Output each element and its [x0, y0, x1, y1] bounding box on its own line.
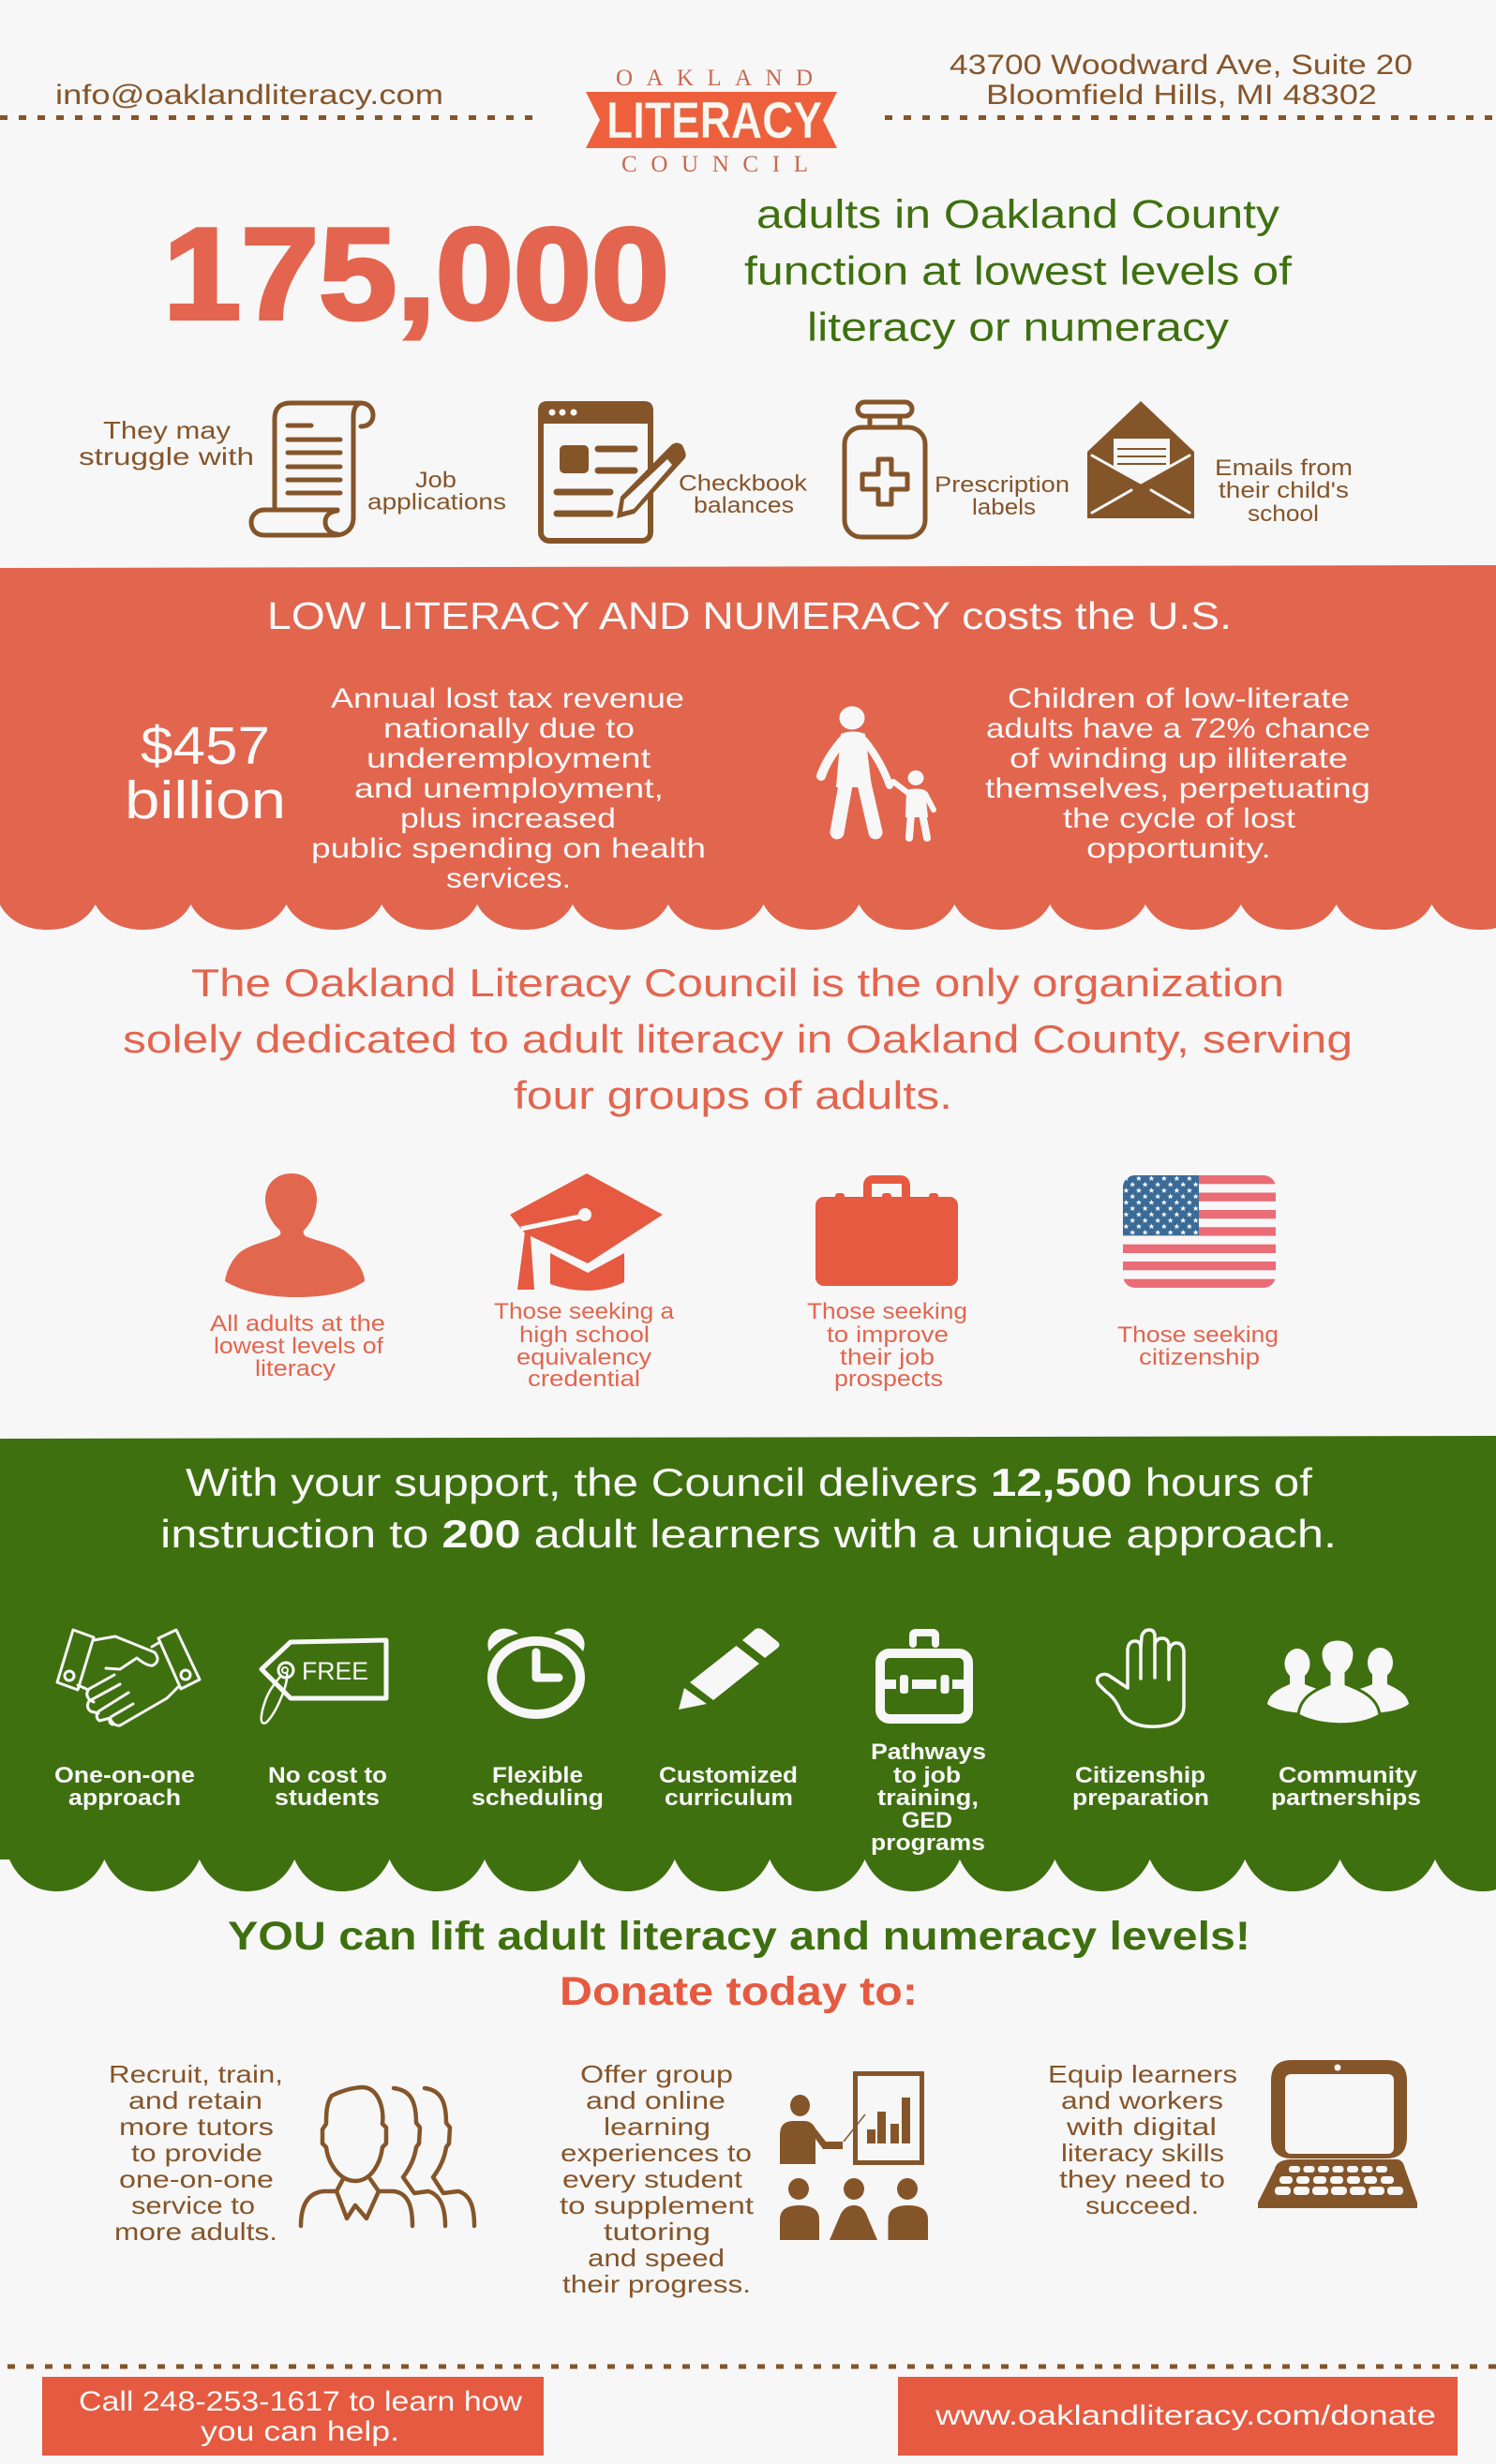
label: high school equivalency: Those seeking a — [494, 1299, 675, 1324]
logo: Oakland Literacy Council: COUNCIL — [621, 152, 808, 177]
header: street address — [950, 50, 1413, 111]
label: citizenship: citizenship — [1139, 1345, 1260, 1370]
label: job prospects: Those seeking — [807, 1299, 967, 1324]
icon: scroll — [251, 403, 373, 535]
icon: free tag: FREE — [302, 1657, 368, 1685]
label: all adults: literacy — [255, 1356, 336, 1381]
label: high school equivalency: credential — [528, 1366, 640, 1392]
text: offer group and online learning: and online — [586, 2086, 726, 2114]
stat: $457 billion — [125, 716, 286, 830]
labels: approach features: training, — [877, 1785, 979, 1811]
label: job prospects: prospects — [834, 1366, 943, 1392]
text: annual lost tax revenue: nationally due to — [383, 713, 635, 744]
label: citizenship — [1117, 1322, 1279, 1370]
labels: approach features: Community — [1279, 1763, 1418, 1788]
text: annual lost tax revenue: services. — [446, 863, 571, 894]
label: job prospects: to improve — [827, 1322, 949, 1348]
text: children of low-literate adults: Children of low-literate — [1008, 683, 1350, 714]
statistic description: function at lowest levels of — [744, 249, 1293, 294]
label: job applications: Job — [415, 468, 456, 493]
text: they may struggle with — [79, 416, 254, 470]
heading: you can lift adult literacy: YOU can lift adult literacy and numeracy levels! — [228, 1914, 1250, 1959]
labels: approach features: programs — [871, 1830, 985, 1856]
label: emails from their child's school — [1215, 455, 1353, 527]
text: offer group and online learning: every student — [562, 2165, 743, 2193]
icon: adult silhouette — [225, 1173, 365, 1297]
text: offer group and online learning: learning — [604, 2113, 711, 2141]
label: job prospects — [807, 1299, 967, 1392]
heading: only organization dedicated to adult literacy: The Oakland Literacy Council is the only organization — [191, 961, 1284, 1005]
text: annual lost tax revenue: Annual lost tax revenue — [331, 683, 684, 714]
statistic description — [744, 192, 1293, 351]
labels: approach features: scheduling — [471, 1785, 604, 1811]
text: recruit tutors: and retain — [128, 2086, 262, 2114]
callout: call to learn how: you can help. — [201, 2416, 399, 2447]
icon: american flag — [1123, 1175, 1276, 1288]
logo: Oakland Literacy Council: LITERACY — [606, 91, 822, 149]
text: recruit tutors: service to — [131, 2191, 255, 2219]
callout: donate url — [898, 2377, 1458, 2456]
labels: approach features: partnerships — [1271, 1785, 1421, 1811]
label: emails from their child's school: Emails from — [1215, 455, 1353, 481]
text: equip learners and workers: succeed. — [1085, 2191, 1199, 2219]
logo: Oakland Literacy Council: OAKLAND — [616, 66, 813, 91]
label: emails from their child's school: school — [1248, 501, 1319, 527]
icon: community group — [1267, 1639, 1409, 1725]
icon: medicine bottle — [845, 402, 925, 537]
header dotted rule left — [0, 115, 534, 120]
header: email contact: info@oaklandliteracy.com — [55, 80, 443, 111]
text: equip learners and workers: and workers — [1061, 2086, 1223, 2114]
panel: unique approach — [0, 1436, 1496, 1891]
logo: Oakland Literacy Council — [586, 66, 837, 177]
heading: only organization dedicated to adult literacy: solely dedicated to adult literacy in Oakland County, serving — [123, 1017, 1353, 1061]
label: citizenship: Those seeking — [1117, 1322, 1279, 1348]
label: job prospects: their job — [840, 1345, 935, 1370]
label: emails from their child's school: their child's — [1219, 478, 1349, 503]
panel: cost of low literacy — [0, 565, 1496, 930]
icon: pencil — [679, 1628, 780, 1710]
heading: with your support: instruction to 200 adult learners with a unique approach. — [160, 1512, 1337, 1556]
label: all adults: All adults at the — [210, 1311, 385, 1337]
text: children of low-literate adults: of winding up illiterate — [1010, 743, 1348, 774]
heading: with your support — [160, 1460, 1337, 1556]
text: recruit tutors: one-on-one — [119, 2165, 274, 2193]
footer dotted rule — [7, 2364, 1496, 2369]
header dotted rule right — [885, 115, 1496, 120]
callout: call to learn how: Call 248-253-1617 to learn how — [79, 2386, 522, 2417]
labels: approach features — [54, 1740, 1421, 1856]
text: annual lost tax revenue: public spending on health — [311, 833, 706, 864]
heading: only organization dedicated to adult literacy — [123, 961, 1353, 1117]
text: children of low-literate adults: opportunity. — [1086, 833, 1271, 864]
text: children of low-literate adults: themselves, perpetuating — [985, 773, 1370, 804]
icon: suitcase — [815, 1179, 958, 1286]
text: offer group and online learning: to supplement — [560, 2191, 755, 2219]
labels: approach features: GED — [902, 1808, 952, 1833]
text: offer group and online learning: their progress. — [562, 2270, 751, 2298]
stat: $457 billion: $457 — [141, 716, 270, 776]
label: checkbook balances — [679, 470, 808, 518]
icon: graduation cap — [510, 1173, 663, 1291]
icon: envelope — [1087, 401, 1194, 518]
label: high school equivalency: high school — [519, 1322, 650, 1348]
labels: approach features: approach — [68, 1785, 181, 1811]
label: prescription labels: labels — [972, 495, 1036, 520]
labels: approach features: No cost to — [268, 1763, 387, 1788]
heading: with your support: With your support, the Council delivers 12,500 hours of — [186, 1460, 1312, 1504]
icon: presenter with chart and audience — [780, 2073, 928, 2240]
text: they may struggle with: They may — [103, 416, 231, 444]
text: children of low-literate adults: the cycle of lost — [1063, 803, 1296, 834]
icon: checklist form with pencil — [538, 401, 686, 541]
labels: approach features: Citizenship — [1075, 1763, 1205, 1788]
label: checkbook balances: Checkbook — [679, 470, 808, 497]
icon: three people outlines — [301, 2087, 474, 2226]
text: annual lost tax revenue — [311, 683, 706, 894]
text: recruit tutors: more tutors — [119, 2113, 274, 2141]
label: prescription labels: Prescription — [935, 472, 1070, 498]
label: job applications — [367, 468, 506, 515]
text: annual lost tax revenue: plus increased — [400, 803, 616, 834]
labels: approach features: Flexible — [492, 1763, 583, 1788]
icon: adult and child — [821, 707, 934, 838]
icon: free tag — [262, 1640, 386, 1724]
text: offer group and online learning — [560, 2060, 755, 2298]
text: equip learners and workers: literacy skills — [1061, 2139, 1224, 2167]
statistic description: literacy or numeracy — [807, 306, 1230, 351]
icon: raised hand — [1098, 1630, 1184, 1726]
header: street address: Bloomfield Hills, MI 48302 — [986, 80, 1377, 111]
callout: call to learn how — [42, 2377, 544, 2456]
text: annual lost tax revenue: underemployment — [367, 743, 651, 774]
text: equip learners and workers: with digital — [1066, 2113, 1217, 2141]
callout: donate url: www.oaklandliteracy.com/donate — [935, 2400, 1436, 2431]
labels: approach features: students — [275, 1785, 380, 1811]
text: recruit tutors: to provide — [131, 2139, 262, 2167]
labels: approach features: curriculum — [665, 1785, 793, 1811]
label: job applications: applications — [367, 489, 506, 515]
label: high school equivalency — [494, 1299, 675, 1392]
label: checkbook balances: balances — [694, 493, 794, 518]
big statistic 175,000: 175,000 — [163, 202, 669, 347]
text: children of low-literate adults — [985, 683, 1370, 864]
icon: handshake — [57, 1630, 200, 1725]
text: equip learners and workers: Equip learners — [1048, 2060, 1237, 2088]
text: offer group and online learning: experiences to — [561, 2139, 752, 2167]
label: prescription labels — [935, 472, 1070, 520]
statistic description: adults in Oakland County — [756, 192, 1280, 237]
heading: costs the U.S.: LOW LITERACY AND NUMERACY costs the U.S. — [267, 594, 1232, 637]
text: equip learners and workers: they need to — [1059, 2165, 1225, 2193]
labels: approach features: One-on-one — [54, 1763, 195, 1788]
labels: approach features: Pathways — [871, 1740, 986, 1765]
text: offer group and online learning: Offer group — [580, 2060, 733, 2088]
icon: laptop — [1258, 2060, 1417, 2208]
label: high school equivalency: equivalency — [516, 1345, 651, 1370]
label: all adults — [210, 1311, 385, 1381]
label: all adults: lowest levels of — [214, 1334, 383, 1359]
text: children of low-literate adults: adults have a 72% chance — [986, 713, 1370, 744]
text: recruit tutors: Recruit, train, — [109, 2060, 283, 2088]
text: equip learners and workers — [1048, 2060, 1237, 2219]
labels: approach features: Customized — [659, 1763, 798, 1788]
icon: briefcase — [875, 1633, 972, 1719]
labels: approach features: preparation — [1072, 1785, 1209, 1811]
labels: approach features: to job — [893, 1763, 961, 1788]
text: recruit tutors — [109, 2060, 283, 2246]
text: they may struggle with: struggle with — [79, 442, 254, 470]
text: recruit tutors: more adults. — [114, 2218, 277, 2246]
heading: only organization dedicated to adult literacy: four groups of adults. — [514, 1073, 952, 1117]
icon: alarm clock — [487, 1629, 585, 1714]
header: street address: 43700 Woodward Ave, Suite 20 — [950, 50, 1413, 81]
stat: $457 billion: billion — [125, 770, 286, 830]
heading: donate today: Donate today to: — [560, 1969, 918, 2014]
text: offer group and online learning: tutoring — [604, 2218, 711, 2246]
text: annual lost tax revenue: and unemployment, — [354, 773, 664, 804]
text: offer group and online learning: and speed — [588, 2244, 725, 2272]
